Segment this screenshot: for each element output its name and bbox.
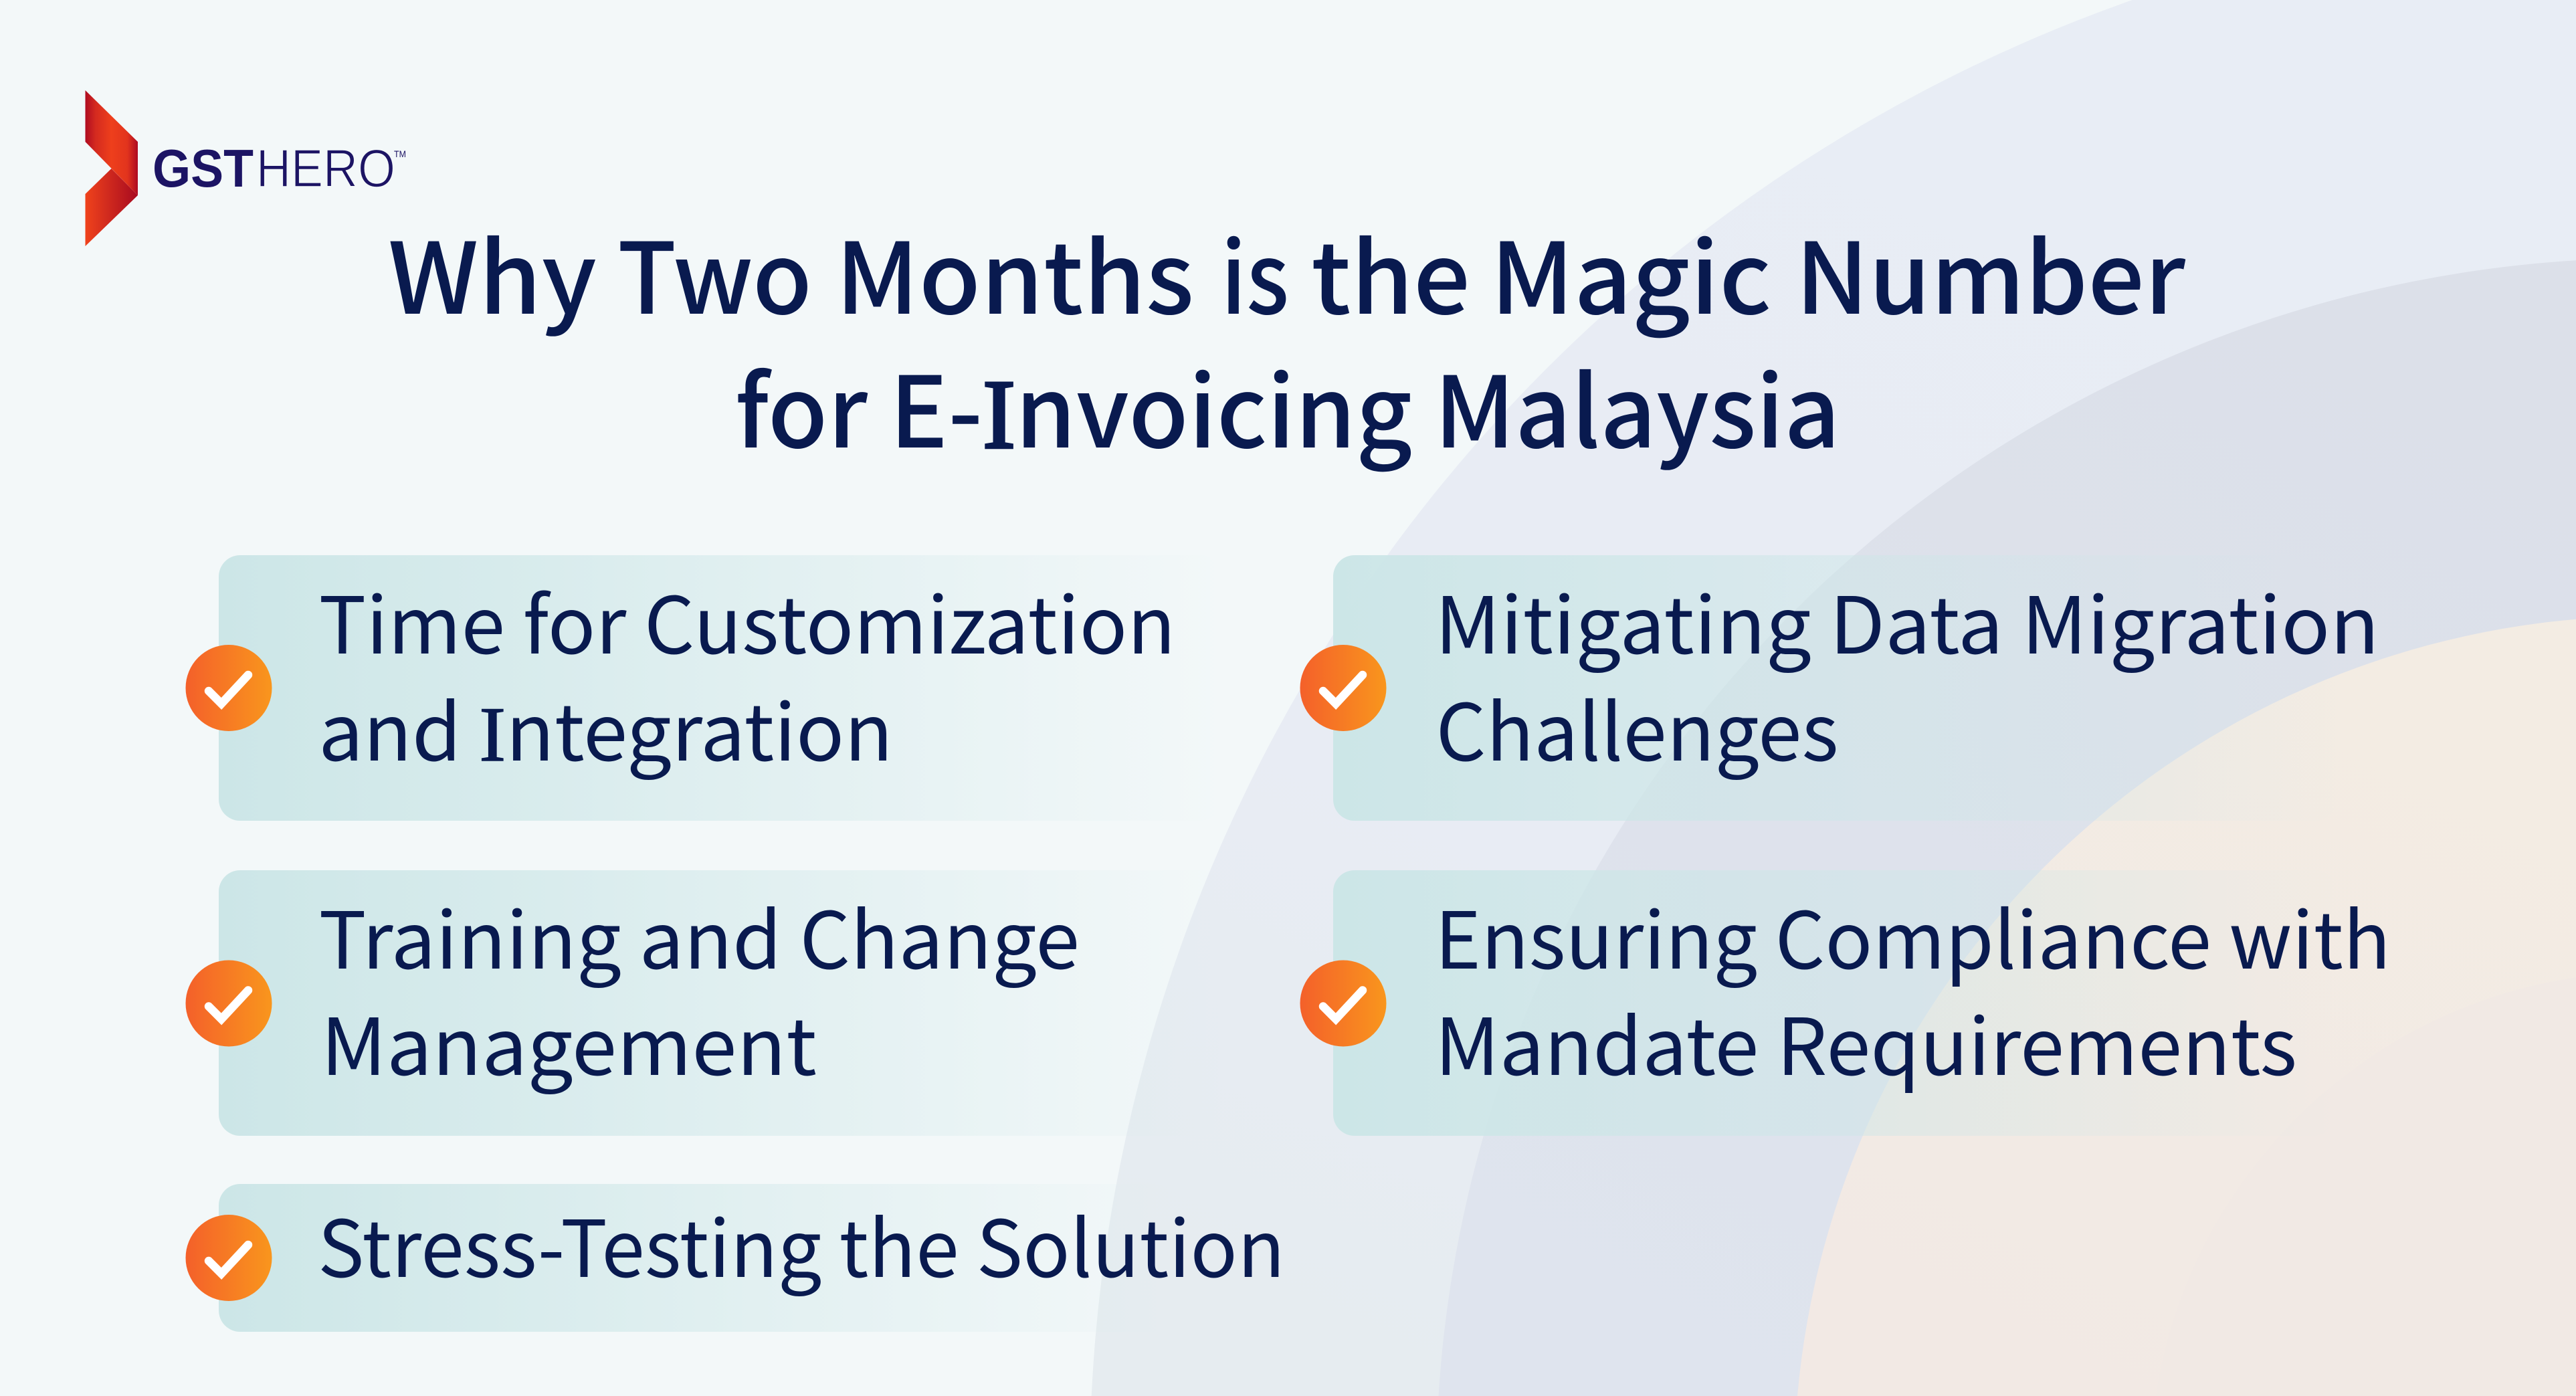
text: item label: Ensuring Compliance with [1435, 878, 2391, 991]
icon: check badge [186, 961, 272, 1046]
panel: Training and Change Management [186, 870, 1222, 1136]
text: item label: Challenges [1435, 670, 1838, 783]
logo wordmark: HERO [256, 138, 395, 198]
title: for E-Invoicing Malaysia [735, 334, 1840, 476]
panel: Mitigating Data Migration Challenges [1300, 555, 2379, 821]
title: Two [617, 200, 812, 342]
text: item label: and Integration [318, 670, 886, 783]
panel: Stress-Testing the Solution [186, 1184, 1285, 1332]
title: Magic [1490, 200, 1771, 342]
text: item label: Time for Customization [318, 563, 1176, 676]
logo wordmark: TM [394, 148, 406, 159]
panel: Ensuring Compliance with Mandate Requirements [1300, 870, 2391, 1136]
logo: GST Hero [86, 90, 406, 246]
text: item label: Management [321, 984, 817, 1098]
text: item label: Mandate Requirements [1435, 984, 2297, 1098]
title: Months [835, 200, 1194, 342]
icon: check badge [1300, 645, 1386, 731]
icon: check badge [186, 645, 272, 731]
title: Number [1795, 200, 2186, 342]
title: Why [388, 200, 597, 342]
title: the [1311, 200, 1470, 342]
title [388, 200, 2186, 476]
icon: logo chevron [86, 90, 138, 246]
text: item label: Stress-Testing the Solution [318, 1186, 1285, 1300]
title: is [1221, 200, 1289, 342]
text: item label: Mitigating Data Migration [1435, 563, 2379, 676]
logo wordmark [153, 138, 406, 198]
panel: Time for Customization and Integration [186, 555, 1222, 821]
icon: check badge [1300, 961, 1386, 1046]
text: item label: Training and Change [318, 878, 1080, 991]
icon: check badge [186, 1215, 272, 1301]
background concentric arcs [1092, 0, 2576, 1396]
logo wordmark: GST [153, 138, 254, 198]
